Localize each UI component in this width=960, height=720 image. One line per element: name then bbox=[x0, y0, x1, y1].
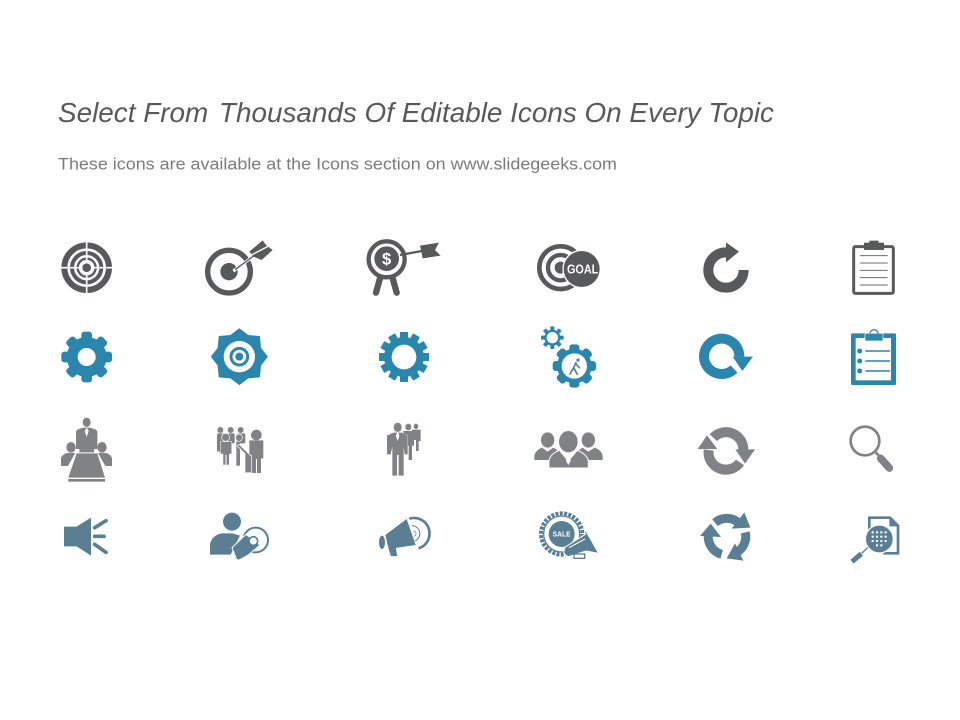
icon: document with magnifier bbox=[852, 517, 899, 562]
icon: magnifying glass bbox=[851, 427, 889, 468]
icon: sale badge with megaphone bbox=[541, 513, 599, 558]
icon: goal target: GOAL bbox=[567, 262, 598, 277]
icon: grey clipboard bbox=[854, 241, 893, 293]
icon: blue checklist clipboard bbox=[851, 330, 896, 385]
icon group: rows three and four, right bbox=[534, 427, 899, 562]
icon: blue refresh arrow bbox=[704, 339, 753, 374]
icon: target with arrow bbox=[208, 240, 273, 293]
icon: gear three bbox=[379, 332, 429, 382]
icon: goal target bbox=[539, 246, 601, 289]
icon group: rows one and two, right bbox=[539, 241, 896, 388]
icon group: rows one and two, left bbox=[61, 240, 441, 384]
icon: crosshair target bbox=[61, 242, 113, 294]
icon: person with tag bbox=[210, 513, 268, 560]
icon: two-arrow refresh bbox=[698, 432, 755, 470]
icon: dollar target with arrow bbox=[369, 241, 441, 293]
icon: sale badge with megaphone: SALE bbox=[553, 530, 571, 539]
icon: megaphone with waves bbox=[379, 518, 430, 556]
icon: redo arrow bbox=[708, 242, 744, 288]
icon: business people line bbox=[387, 423, 421, 476]
icon: gears with walker bbox=[541, 326, 596, 388]
icon: team of three bbox=[534, 431, 603, 468]
subtitle: These icons are available at the Icons section on www.slidegeeks.com bbox=[58, 156, 617, 174]
title: Select From Thousands Of Editable Icons On Every Topic bbox=[58, 97, 774, 128]
icon: speaker bbox=[64, 518, 106, 556]
icon: gear one bbox=[61, 332, 112, 382]
icon: gear with target bbox=[212, 329, 267, 384]
icon: team with presenter bbox=[217, 427, 263, 473]
icon: dollar target with arrow: $ bbox=[382, 250, 392, 269]
icon: boardroom meeting bbox=[61, 418, 112, 482]
icon: three-arrow cycle bbox=[700, 512, 750, 561]
icon group: rows three and four, left bbox=[61, 418, 430, 560]
